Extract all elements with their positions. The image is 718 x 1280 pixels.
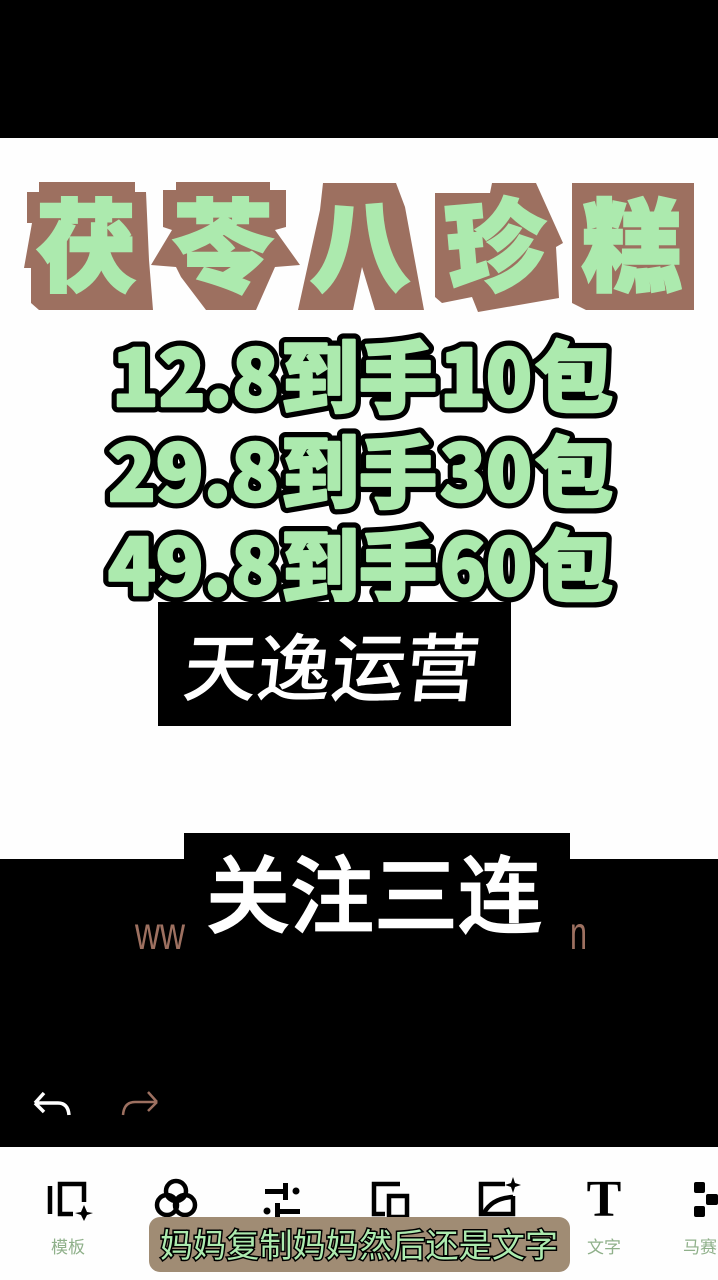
icon: crop layers	[374, 1184, 407, 1217]
price lines: 包	[535, 412, 613, 524]
icon: overlapping circles	[157, 1181, 195, 1215]
label: text: 文字	[587, 1233, 621, 1258]
price lines: 到手	[281, 506, 437, 618]
price lines: 49.8	[108, 506, 279, 618]
brand label: 天逸运营	[179, 610, 486, 717]
price lines: 10	[440, 317, 532, 429]
label: template: 模板	[51, 1233, 85, 1258]
title: 糕	[582, 167, 682, 312]
icon: template	[50, 1184, 93, 1221]
icon: sliders	[264, 1183, 300, 1220]
price lines: 29.8	[108, 412, 279, 524]
partly hidden url text: ww	[134, 907, 186, 959]
bottom toolbar	[0, 1147, 718, 1280]
price lines: 29.8	[108, 412, 279, 524]
price lines: 包	[535, 317, 613, 429]
label: mosaic: 马赛	[683, 1233, 717, 1258]
price lines	[108, 317, 613, 618]
lower black panel	[0, 833, 718, 1147]
price lines: 60	[440, 506, 532, 618]
partly hidden url text	[134, 907, 587, 959]
title	[24, 163, 694, 316]
price lines: 10	[440, 317, 532, 429]
price lines: 包	[535, 412, 613, 524]
price lines: 30	[440, 412, 532, 524]
icon: redo arrow	[123, 1092, 157, 1115]
icon: image sparkle	[481, 1177, 521, 1214]
price lines: 60	[440, 506, 532, 618]
price lines: 到手	[281, 412, 437, 524]
price lines: 包	[535, 317, 613, 429]
icon: mosaic	[694, 1182, 718, 1217]
subtitle caption: 妈妈复制妈妈然后还是文字	[160, 1219, 558, 1267]
price lines: 30	[440, 412, 532, 524]
price lines: 包	[535, 506, 613, 618]
title: 苓	[173, 167, 273, 312]
title: 珍	[439, 163, 554, 316]
icon: text T: T	[587, 1171, 621, 1228]
icon: undo arrow	[35, 1093, 69, 1115]
price lines: 12.8	[112, 317, 279, 429]
follow heading: 关注三连	[206, 830, 542, 951]
price lines: 包	[535, 506, 613, 618]
partly hidden url text: n	[570, 907, 587, 959]
title: 茯	[36, 167, 136, 312]
top black band	[0, 0, 718, 138]
price lines: 到手	[281, 317, 437, 429]
title: 八	[310, 167, 410, 312]
price lines: 49.8	[108, 506, 279, 618]
price lines: 到手	[281, 412, 437, 524]
price lines: 12.8	[112, 317, 279, 429]
price lines: 到手	[281, 317, 437, 429]
price lines: 到手	[281, 506, 437, 618]
